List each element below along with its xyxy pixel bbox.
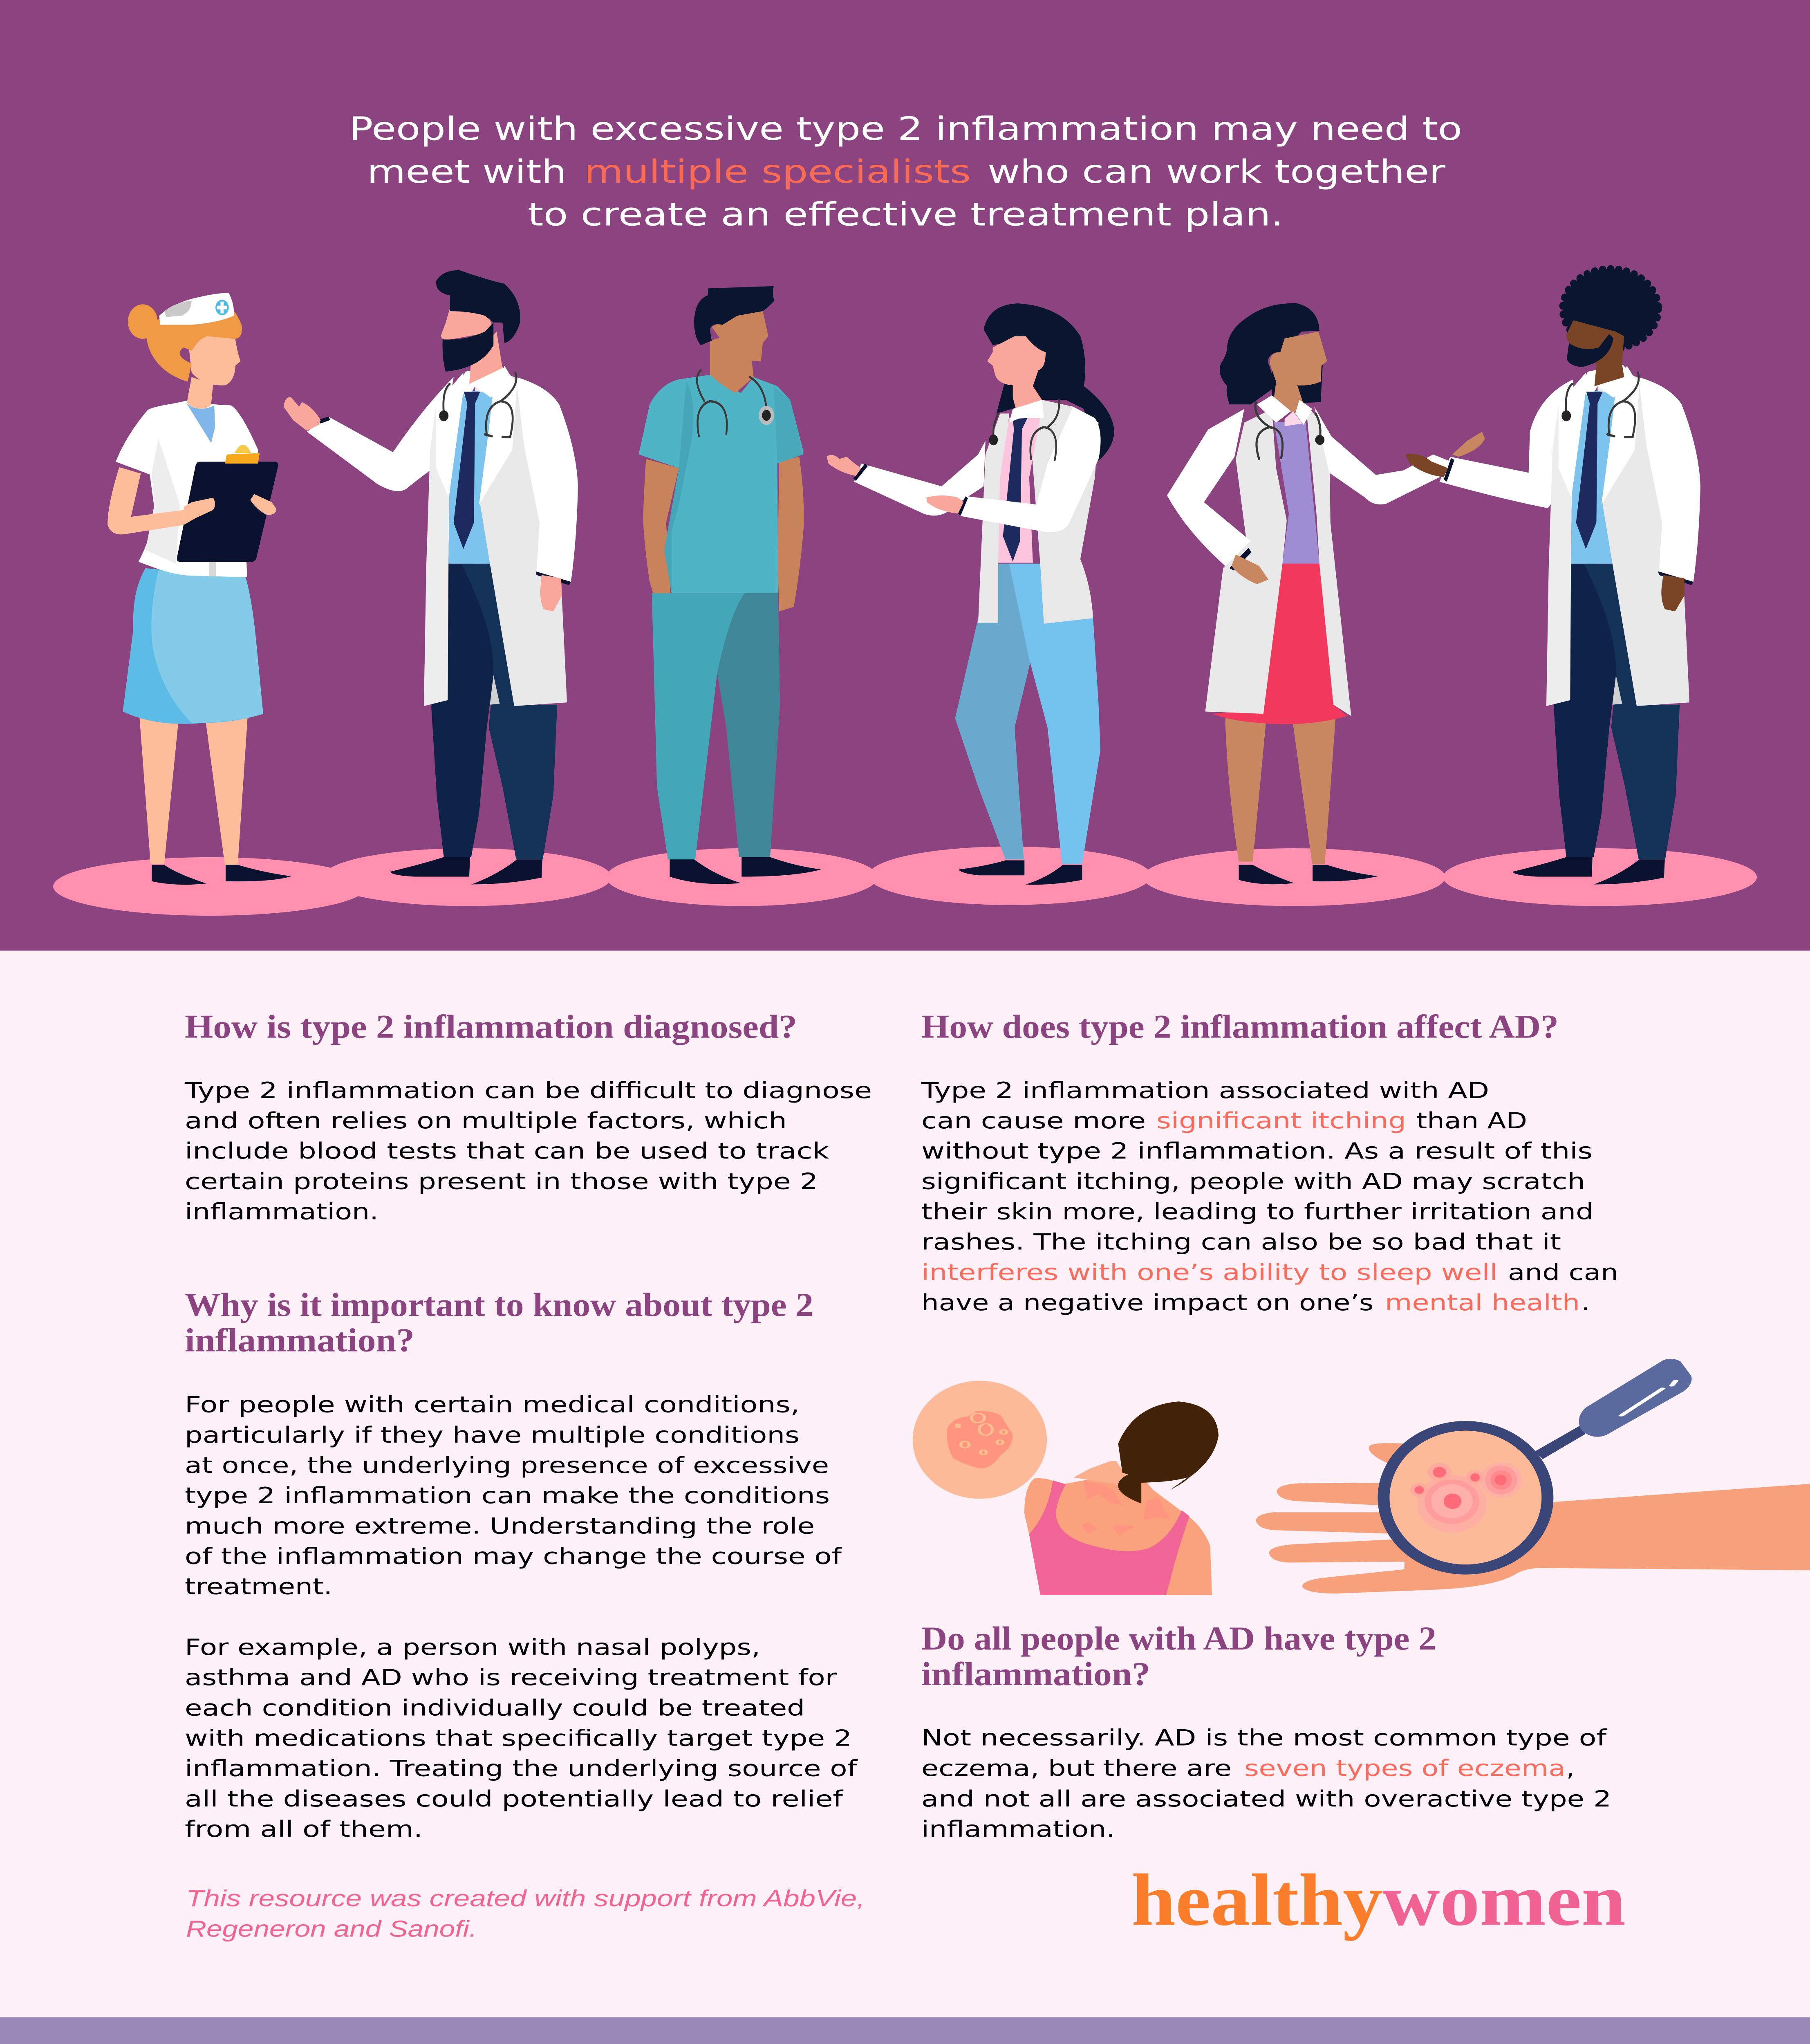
text block: importance <box>185 1392 842 1600</box>
figure: doctor with curly hair and red skirt <box>1167 303 1485 884</box>
figure: doctor with long dark hair <box>827 303 1114 885</box>
text block: diagnosis: inflammation. <box>185 1199 379 1225</box>
icon: magnified skin patch <box>913 1381 1047 1499</box>
illustration: hand under magnifying glass <box>1256 1359 1810 1594</box>
text block: importance: of the inflammation may change the course of <box>185 1543 842 1569</box>
text block: importance: treatment. <box>185 1573 332 1600</box>
text block: effect on AD: have a negative impact on one’s <box>921 1290 1373 1316</box>
logo: healthywomen <box>1131 1859 1626 1941</box>
text block: all people with AD: inflammation. <box>921 1816 1115 1842</box>
title: to create an effective treatment plan. <box>528 196 1284 233</box>
text block: importance: much more extreme. Understanding the role <box>185 1513 815 1539</box>
text block: effect on AD: interferes with one’s ability to sleep well <box>921 1260 1498 1285</box>
heading: importance <box>185 1286 813 1359</box>
logo: healthywomen: healthy <box>1131 1859 1382 1941</box>
text block: effect on AD: significant itching, people with AD may scratch <box>921 1168 1585 1194</box>
title: People with excessive type 2 inflammation may need to <box>349 110 1462 148</box>
text block: effect on AD: rashes. The itching can also be so bad that it <box>921 1229 1561 1255</box>
figure: doctor with afro <box>1406 269 1700 884</box>
figure: nurse with clipboard <box>108 293 291 885</box>
illustration: woman scratching rash <box>913 1381 1219 1595</box>
text block: effect on AD: and can <box>1508 1260 1618 1285</box>
text block: importance: For people with certain medical conditions, <box>185 1392 800 1418</box>
text block: importance: particularly if they have multiple conditions <box>185 1422 800 1448</box>
text block: example: For example, a person with nasal polyps, <box>185 1634 760 1660</box>
figure: nurse in teal scrubs <box>639 286 821 884</box>
text block: effect on AD: mental health <box>1385 1290 1580 1316</box>
text block: effect on AD <box>921 1078 1618 1316</box>
heading: importance: Why is it important to know about type 2 <box>185 1286 813 1324</box>
text block: diagnosis: Type 2 inflammation can be difficult to diagnose <box>184 1078 872 1103</box>
panel: right text column <box>913 1008 1810 1842</box>
text block: diagnosis: and often relies on multiple factors, which <box>185 1108 787 1134</box>
text block: all people with AD: seven types of eczema <box>1244 1755 1566 1781</box>
text block: example: asthma and AD who is receiving treatment for <box>185 1665 837 1690</box>
title <box>349 110 1462 233</box>
text block: all people with AD: , <box>1566 1755 1575 1781</box>
text block: example: inflammation. Treating the underlying source of <box>185 1755 858 1782</box>
title: multiple specialists <box>584 153 971 190</box>
text block: example: with medications that specifically target type 2 <box>185 1725 852 1751</box>
text block: effect on AD: without type 2 inflammation. As a result of this <box>921 1138 1593 1164</box>
title: meet with <box>367 153 567 190</box>
text block: diagnosis <box>184 1078 872 1225</box>
heading: all people with AD <box>921 1620 1436 1693</box>
text block: all people with AD: and not all are associated with overactive type 2 <box>921 1786 1611 1812</box>
text block: importance: at once, the underlying presence of excessive <box>185 1452 829 1478</box>
text block: effect on AD: their skin more, leading to further irritation and <box>921 1199 1594 1225</box>
title: who can work together <box>988 153 1445 190</box>
text block: all people with AD: eczema, but there are <box>921 1755 1232 1781</box>
text block: effect on AD: significant itching <box>1156 1108 1406 1134</box>
heading: importance: inflammation? <box>185 1322 414 1359</box>
panel: left text column <box>184 1008 872 1941</box>
heading: all people with AD: inflammation? <box>921 1656 1150 1693</box>
text block: importance: type 2 inflammation can make the conditions <box>185 1483 830 1508</box>
text block: effect on AD: Type 2 inflammation associated with AD <box>921 1078 1489 1103</box>
text block: example: from all of them. <box>185 1816 423 1842</box>
text block: diagnosis: include blood tests that can be used to track <box>185 1138 829 1164</box>
header background panel <box>0 0 1810 950</box>
text block: effect on AD: . <box>1582 1290 1590 1316</box>
heading: effect on AD: How does type 2 inflammation affect AD? <box>921 1008 1559 1045</box>
logo: healthywomen: women <box>1382 1859 1626 1941</box>
text block: diagnosis: certain proteins present in those with type 2 <box>185 1168 818 1194</box>
support note: This resource was created with support from AbbVie, <box>186 1885 865 1911</box>
heading: all people with AD: Do all people with AD have type 2 <box>921 1620 1436 1657</box>
figure: bearded doctor <box>284 270 578 884</box>
text block: effect on AD: than AD <box>1416 1108 1527 1134</box>
text block: effect on AD: can cause more <box>921 1108 1146 1134</box>
text block: example: all the diseases could potentially lead to relief <box>185 1786 844 1812</box>
heading: diagnosis: How is type 2 inflammation diagnosed? <box>185 1008 797 1045</box>
pink floor ellipses <box>53 847 1757 916</box>
support note: Regeneron and Sanofi. <box>186 1916 477 1941</box>
text block: all people with AD: Not necessarily. AD is the most common type of <box>921 1725 1607 1751</box>
text block: example: each condition individually could be treated <box>185 1695 805 1721</box>
text block: example <box>185 1634 858 1842</box>
footer bar <box>0 2017 1810 2044</box>
text block: all people with AD <box>921 1725 1611 1842</box>
support note <box>186 1885 865 1941</box>
